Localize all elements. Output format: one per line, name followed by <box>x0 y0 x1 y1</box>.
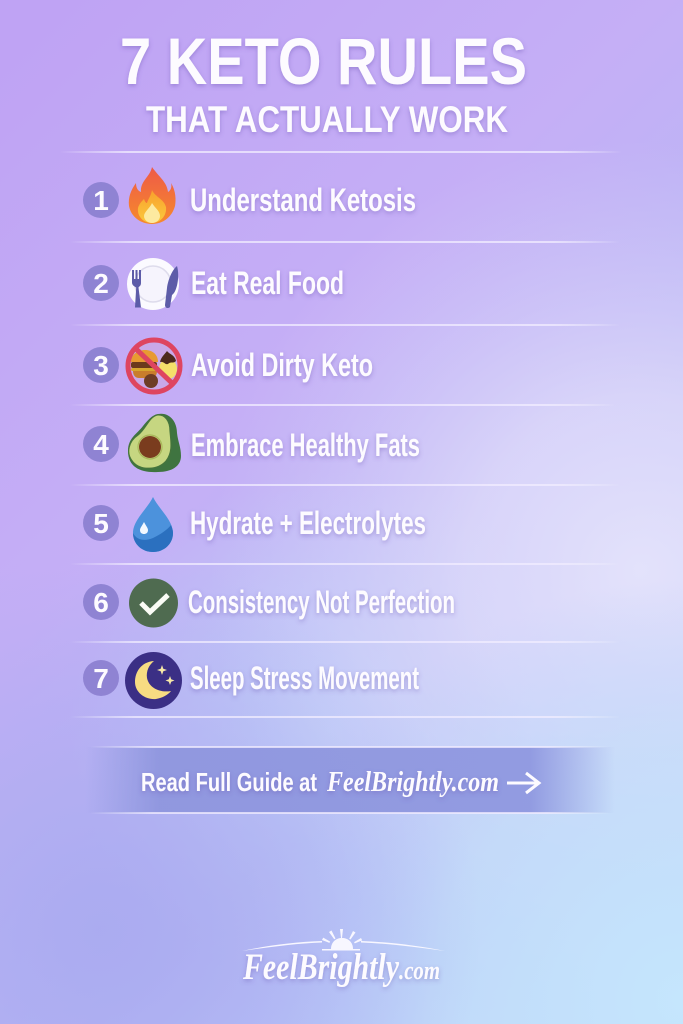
title: 7 KETO RULES <box>120 24 527 98</box>
rule text 4: Embrace Healthy Fats <box>191 427 420 463</box>
number badge 5: 5 <box>93 508 109 539</box>
rule text 7: Sleep Stress Movement <box>190 660 419 696</box>
call to action text: FeelBrightly.com <box>326 767 499 798</box>
rule 7: sleep stress movement <box>83 652 419 709</box>
title: THAT ACTUALLY WORK <box>146 99 508 140</box>
number badge 2: 2 <box>93 268 109 299</box>
row dividers <box>60 151 622 718</box>
icon: plate with fork and knife <box>127 258 179 310</box>
icon: flame <box>129 167 176 224</box>
number badge 6: 6 <box>93 587 109 618</box>
icon: avocado <box>128 414 181 472</box>
call to action text <box>141 767 499 798</box>
rule text 2: Eat Real Food <box>191 265 344 301</box>
call to action text: Read Full Guide at <box>141 767 317 797</box>
icon: check mark <box>129 578 178 628</box>
rule text 6: Consistency Not Perfection <box>188 584 455 620</box>
number badge 5 <box>83 505 119 541</box>
call to action band <box>85 746 615 814</box>
number badge 4 <box>83 426 119 462</box>
title <box>120 24 527 140</box>
rule text 5: Hydrate + Electrolytes <box>190 505 426 541</box>
logo wordmark: FeelBrightly <box>242 947 399 988</box>
rule 3: avoid dirty keto <box>83 339 373 393</box>
rule text 1: Understand Ketosis <box>190 182 416 218</box>
icon: moon and stars <box>125 652 182 709</box>
number badge 1: 1 <box>93 185 109 216</box>
rule text 3: Avoid Dirty Keto <box>191 347 373 383</box>
number badge 6 <box>83 584 119 620</box>
number badge 3 <box>83 347 119 383</box>
logo: FeelBrightly.com <box>242 929 445 988</box>
arrow <box>507 773 539 793</box>
rule 5: hydrate + electrolytes <box>83 497 426 552</box>
sunrise mark <box>242 929 445 951</box>
rule 4: embrace healthy fats <box>83 414 420 472</box>
number badge 7: 7 <box>93 663 109 694</box>
rule 6: consistency not perfection <box>83 578 455 628</box>
icon: prohibited junk food <box>127 339 181 393</box>
number badge 1 <box>83 182 119 218</box>
icon: water drop <box>133 497 173 552</box>
rule 1: understand ketosis <box>83 167 416 224</box>
number badge 4: 4 <box>93 429 109 460</box>
logo wordmark: .com <box>399 956 440 985</box>
rule 2: eat real food <box>83 258 344 310</box>
number badge 3: 3 <box>93 350 109 381</box>
number badge 7 <box>83 660 119 696</box>
number badge 2 <box>83 265 119 301</box>
